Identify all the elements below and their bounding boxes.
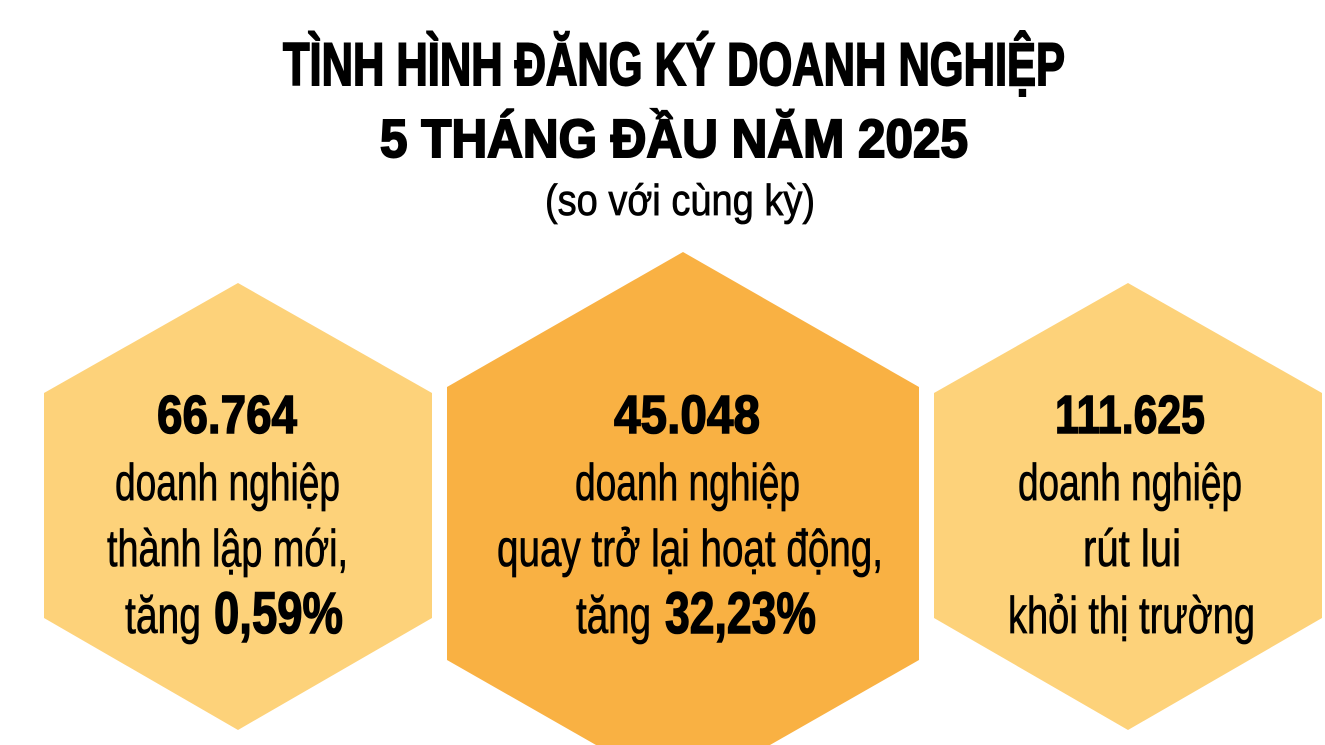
panel: returning businesses: 32,23% bbox=[665, 581, 816, 646]
panel: new businesses: doanh nghiệp bbox=[115, 454, 340, 512]
title: 5 THÁNG ĐẦU NĂM 2025 bbox=[380, 109, 968, 169]
panel: returning businesses: doanh nghiệp bbox=[575, 454, 800, 512]
panel: returning businesses: quay trở lại hoạt động, bbox=[497, 520, 883, 578]
panel: returning businesses: tăng bbox=[576, 587, 651, 645]
panel: returning businesses bbox=[447, 252, 919, 745]
panel: exiting businesses: doanh nghiệp bbox=[1018, 454, 1242, 512]
panel: new businesses bbox=[44, 283, 432, 730]
panel: exiting businesses bbox=[934, 283, 1322, 730]
title bbox=[283, 31, 1065, 169]
panel: exiting businesses: rút lui bbox=[1083, 520, 1181, 578]
panel: new businesses: tăng bbox=[125, 587, 201, 645]
panel: new businesses: 0,59% bbox=[214, 581, 343, 646]
panel: returning businesses: 45.048 bbox=[614, 385, 760, 445]
panel: new businesses: 66.764 bbox=[157, 385, 297, 445]
panel: new businesses: thành lập mới, bbox=[107, 520, 348, 578]
subtitle: (so với cùng kỳ) bbox=[545, 176, 815, 225]
panel: exiting businesses: 111.625 bbox=[1055, 385, 1205, 445]
